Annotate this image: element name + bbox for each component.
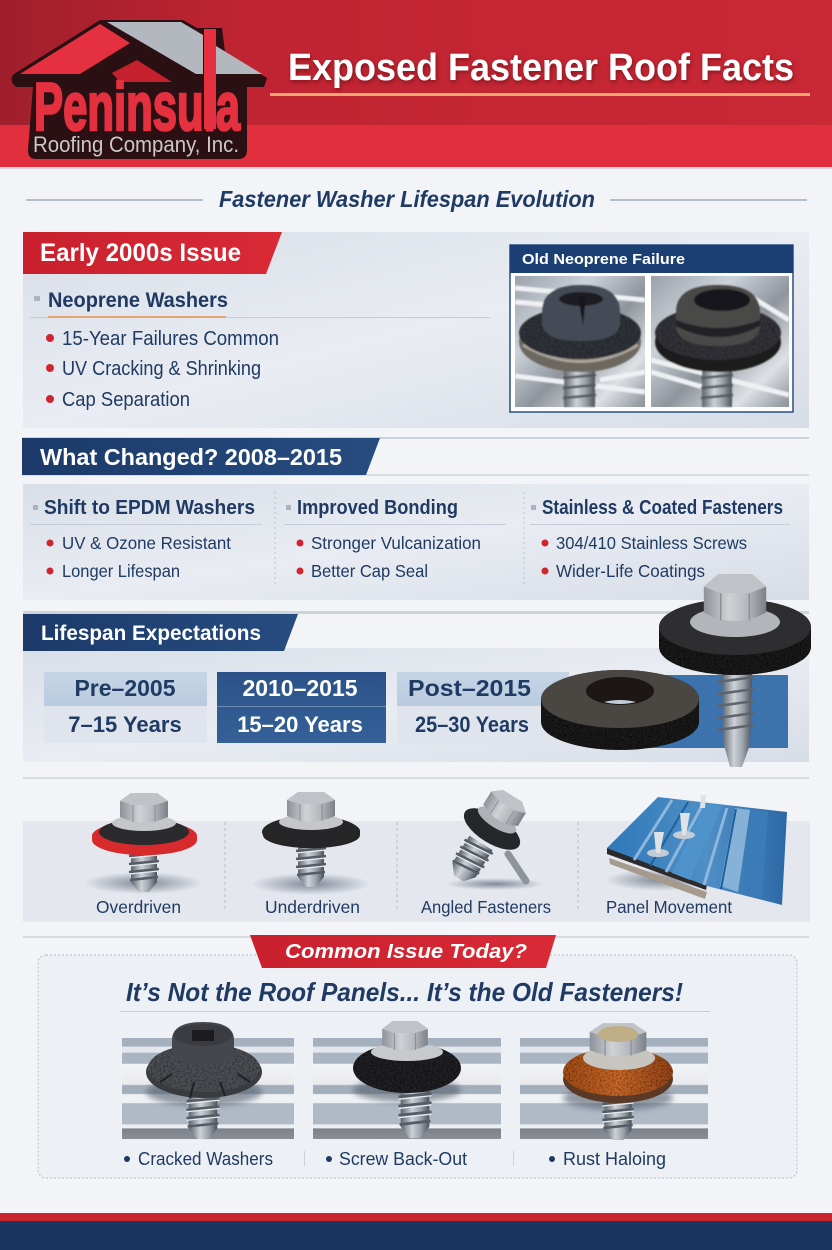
photo: cracked cap [515, 276, 645, 407]
image: flat washer [541, 670, 699, 750]
list: neoprene failures: 15-Year Failures Common [62, 327, 279, 350]
photo card: old neoprene failure: Old Neoprene Failure [522, 251, 685, 268]
label: overdriven: Overdriven [96, 897, 181, 917]
section band: what changed: What Changed? 2008–2015 [40, 444, 342, 470]
label: panel movement: Panel Movement [606, 897, 732, 917]
logo: Peninsula Roofing Company: Roofing Company, Inc. [33, 132, 239, 157]
labels: common issues: Cracked Washers [138, 1148, 273, 1169]
footer band [0, 1213, 832, 1250]
photo: cracked washer [122, 1022, 294, 1139]
column: stainless and coated fasteners: Stainless & Coated Fasteners [542, 497, 783, 519]
photo: rust haloing [520, 1023, 708, 1140]
card: 2010-2015 [217, 672, 386, 743]
divider rule [23, 936, 809, 938]
icon: overdriven fastener [83, 793, 203, 894]
list: neoprene failures: Cap Separation [62, 388, 190, 411]
section band: what changed [22, 437, 809, 476]
card: 2010-2015: 2010–2015 [242, 675, 358, 701]
panel: common issue today [38, 935, 797, 1178]
column: stainless and coated fasteners [530, 497, 790, 581]
logo: Peninsula Roofing Company [11, 20, 267, 159]
card: post-2015 [397, 672, 569, 743]
card: pre-2005: Pre–2005 [74, 675, 176, 701]
section heading: lifespan evolution: Fastener Washer Lifespan Evolution [219, 186, 595, 212]
label: angled fasteners: Angled Fasteners [421, 897, 551, 917]
panel: installation issues [23, 777, 810, 922]
labels: common issues: Screw Back-Out [339, 1148, 467, 1169]
column: stainless and coated fasteners: 304/410 Stainless Screws [556, 533, 747, 553]
list: neoprene failures [46, 327, 279, 411]
title: Exposed Fastener Roof Facts [288, 47, 794, 89]
label: underdriven: Underdriven [265, 897, 360, 917]
photo: screw back-out [313, 1021, 501, 1139]
blue backing panel [640, 675, 788, 748]
icon: metal panel movement [605, 795, 787, 905]
column: EPDM washers [30, 497, 262, 581]
column: improved bonding: Better Cap Seal [311, 561, 428, 581]
header banner [0, 0, 832, 169]
column: EPDM washers: UV & Ozone Resistant [62, 533, 231, 553]
subheading: neoprene washers: Neoprene Washers [48, 289, 228, 312]
labels: common issues [124, 1148, 666, 1169]
icon: underdriven fastener [251, 792, 371, 895]
subheading: neoprene washers [30, 289, 490, 318]
list: neoprene failures: UV Cracking & Shrinking [62, 357, 261, 380]
image: fastener with EPDM washer [659, 574, 811, 767]
card: post-2015: 25–30 Years [415, 712, 529, 737]
banner: early 2000s [23, 232, 282, 274]
headline: It’s Not the Roof Panels... It’s the Old Fasteners! [126, 977, 683, 1007]
icon: angled fastener [445, 785, 545, 890]
column: improved bonding: Stronger Vulcanization [311, 533, 481, 553]
banner: lifespan expectations: Lifespan Expectations [41, 622, 261, 645]
banner: lifespan expectations [23, 614, 298, 651]
card: 2010-2015: 15–20 Years [237, 712, 363, 737]
column: stainless and coated fasteners: Wider-Life Coatings [556, 561, 705, 581]
card: pre-2005: 7–15 Years [68, 712, 182, 737]
column: EPDM washers: Shift to EPDM Washers [44, 497, 255, 519]
panel: lifespan expectations [23, 574, 811, 767]
card: pre-2005 [44, 672, 207, 743]
photo card: old neoprene failure [510, 245, 793, 412]
column: improved bonding: Improved Bonding [297, 497, 458, 519]
panel: early 2000s issue [23, 232, 809, 428]
banner: common issue today: Common Issue Today? [285, 941, 527, 963]
logo: Peninsula Roofing Company: Peninsula [34, 69, 241, 145]
photo: split washer [651, 276, 789, 407]
column: EPDM washers: Longer Lifespan [62, 561, 180, 581]
card: post-2015: Post–2015 [408, 675, 531, 701]
banner: early 2000s: Early 2000s Issue [40, 239, 241, 267]
panel: what changed columns [23, 484, 809, 600]
banner: common issue today [250, 935, 556, 968]
labels: common issues: Rust Haloing [563, 1148, 666, 1169]
column: improved bonding [284, 497, 506, 581]
